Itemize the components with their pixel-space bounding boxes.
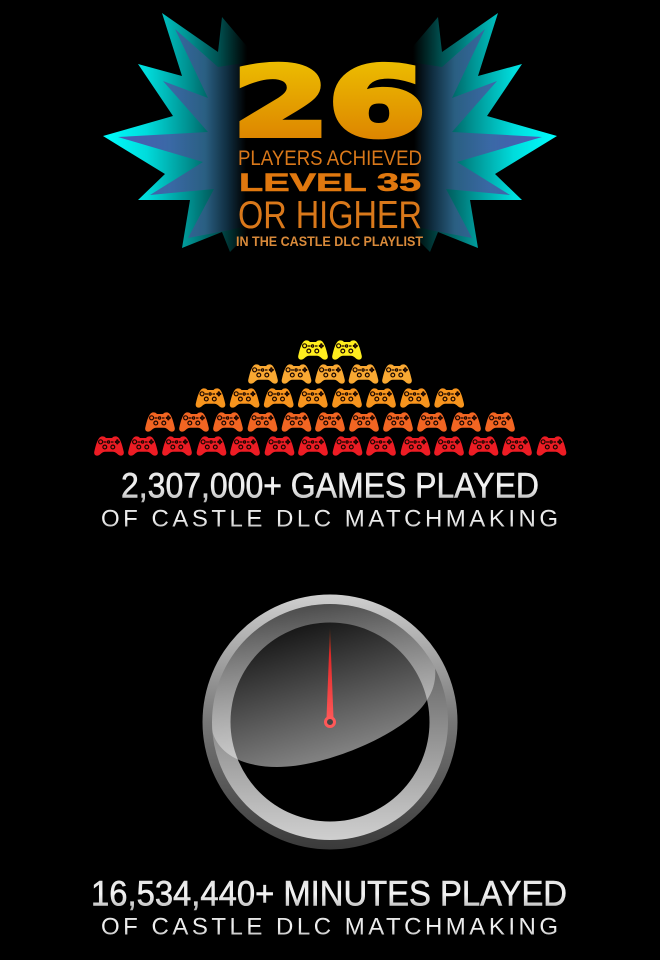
icon: right starburst bbox=[410, 13, 557, 252]
gauge inner ring bbox=[212, 604, 448, 840]
controllers row 1 bbox=[298, 340, 362, 360]
big number 26 bbox=[232, 46, 426, 158]
heading: games played: 2,307,000+ GAMES PLAYED bbox=[121, 466, 539, 506]
controllers row 5 bbox=[94, 436, 566, 456]
big number 26: 6 bbox=[328, 46, 426, 158]
heading: minutes played: 16,534,440+ MINUTES PLAYED bbox=[91, 874, 567, 914]
subheading: castle dlc matchmaking: OF CASTLE DLC MATCHMAKING bbox=[101, 506, 558, 532]
icon: left starburst bbox=[103, 13, 250, 252]
chart: pyramid of game controllers bbox=[94, 340, 566, 456]
controllers row 3 bbox=[196, 388, 464, 408]
controllers row 2 bbox=[248, 364, 412, 384]
text: level 35: LEVEL 35 bbox=[239, 169, 421, 197]
text: or higher: OR HIGHER bbox=[238, 194, 422, 237]
big number 26: 2 bbox=[232, 46, 330, 158]
gauge needle bbox=[326, 628, 334, 726]
text: players achieved: PLAYERS ACHIEVED bbox=[238, 147, 422, 170]
gauge outer ring bbox=[202, 594, 458, 850]
subheading: castle dlc matchmaking: OF CASTLE DLC MATCHMAKING bbox=[101, 914, 558, 940]
controllers row 4 bbox=[145, 412, 515, 432]
panel: level 35 starburst badge bbox=[103, 13, 557, 252]
gauge glass glare bbox=[212, 604, 436, 767]
text: in the castle dlc playlist: IN THE CASTLE DLC PLAYLIST bbox=[236, 233, 423, 249]
gauge black face bbox=[230, 622, 430, 822]
chart: gauge dial bbox=[200, 590, 458, 850]
